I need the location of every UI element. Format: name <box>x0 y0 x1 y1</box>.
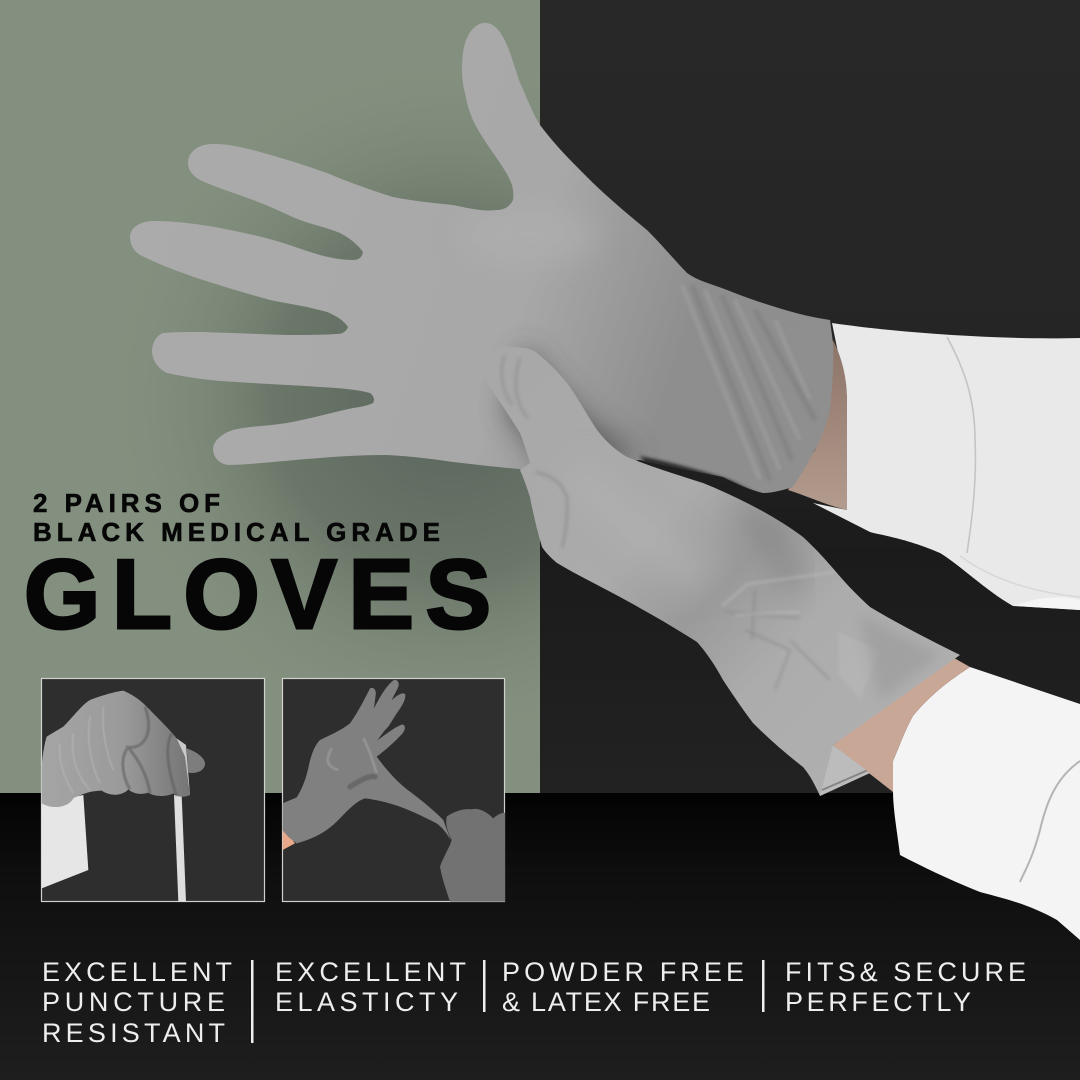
upper hand glove <box>120 10 850 510</box>
feature: excellent puncture resistant: PUNCTURE <box>42 987 225 1017</box>
feature: fits and secure perfectly: PERFECTLY <box>785 987 971 1017</box>
feature: excellent elasticity: ELASTICTY <box>275 987 458 1017</box>
divider 1 <box>251 960 254 1043</box>
inset photo: puncture resistant <box>42 678 264 902</box>
feature: powder free and latex free <box>502 957 744 1017</box>
upper arm shirt sleeve <box>813 323 1080 610</box>
cuff fold <box>820 745 870 796</box>
back of hand highlight <box>570 470 705 580</box>
cuff folds <box>682 285 810 480</box>
curled fingers crease <box>536 472 567 548</box>
wrist skin <box>283 827 295 850</box>
pinching hand <box>440 809 507 902</box>
title word: gloves: GLOVES <box>24 539 491 649</box>
shading near wrist <box>740 510 790 590</box>
feature: excellent puncture resistant: EXCELLENT <box>42 957 232 987</box>
title line: black medical grade: BLACK MEDICAL GRADE <box>33 517 440 547</box>
lower hand glove <box>480 340 970 800</box>
thumb folds <box>502 355 528 418</box>
stretched glove highlights <box>328 738 377 773</box>
feature: excellent puncture resistant <box>42 957 232 1048</box>
feature: excellent elasticity <box>275 957 466 1017</box>
lower arm shirt sleeve <box>893 667 1080 940</box>
dark gap under palm <box>640 456 760 495</box>
divider 2 <box>483 960 486 1012</box>
upper wrist skin <box>788 340 847 510</box>
feature: powder free and latex free: & LATEX FREE <box>502 987 710 1017</box>
feature: excellent puncture resistant: RESISTANT <box>42 1018 225 1048</box>
feature: fits and secure perfectly <box>785 957 1026 1017</box>
inset photo: elasticity <box>282 678 507 902</box>
stretched glove hand <box>283 680 451 843</box>
shirt cuff <box>42 795 88 888</box>
lower wrist skin <box>833 654 970 792</box>
divider 3 <box>762 960 764 1012</box>
probe stick <box>174 795 186 902</box>
title line: 2 pairs of: 2 PAIRS OF <box>33 488 220 518</box>
feature: fits and secure perfectly: FITS& SECURE <box>785 957 1026 987</box>
gloved fist <box>42 691 205 807</box>
title block <box>24 488 491 649</box>
palm highlight <box>460 205 600 265</box>
shadow cast by lower thumb <box>505 345 640 480</box>
feature: powder free and latex free: POWDER FREE <box>502 957 744 987</box>
feature: excellent elasticity: EXCELLENT <box>275 957 466 987</box>
cuff wrinkles <box>747 594 830 689</box>
